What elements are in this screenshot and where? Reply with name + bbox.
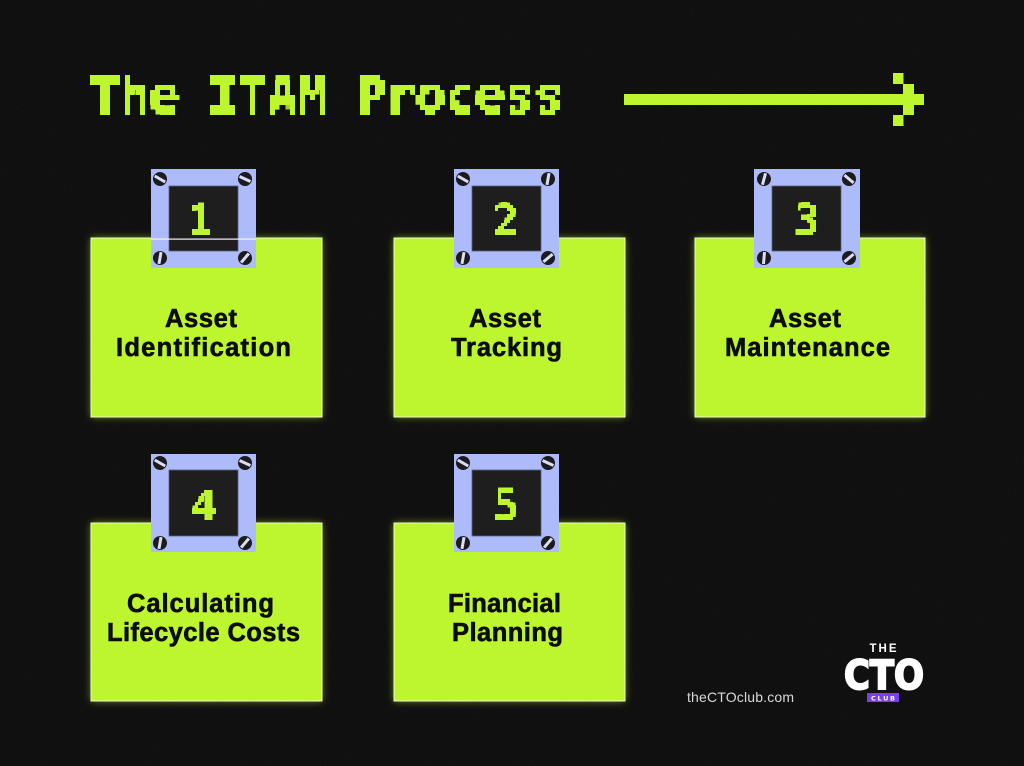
- card 1: Asset Identification: Identification: [116, 334, 291, 362]
- badge 5: 5: [493, 481, 519, 531]
- card 5: Financial Planning: Planning: [452, 619, 563, 647]
- card 1: Asset Identification: Asset: [165, 305, 238, 333]
- badge 2: 2: [493, 196, 519, 246]
- title: The ITAM Process: [90, 67, 564, 125]
- logo: THE: [870, 643, 897, 655]
- card 3: Asset Maintenance: Asset: [769, 305, 842, 333]
- logo: CTO: [844, 653, 924, 699]
- badge 3: [754, 169, 860, 268]
- card 4: Calculating Lifecycle Costs: Lifecycle Costs: [107, 619, 300, 647]
- card 5: Financial Planning: [394, 523, 625, 701]
- card 3: Asset Maintenance: [695, 238, 925, 417]
- badge 5: [453, 453, 559, 553]
- card 3: Asset Maintenance: Maintenance: [725, 334, 890, 362]
- card 2: Asset Tracking: Tracking: [451, 334, 562, 362]
- badge 3: 3: [794, 196, 820, 246]
- card 4: Calculating Lifecycle Costs: [91, 523, 322, 701]
- badge 2: [453, 169, 559, 268]
- card 5: Financial Planning: Financial: [448, 590, 561, 618]
- badge 1: [150, 169, 256, 268]
- card 2: Asset Tracking: Asset: [469, 305, 542, 333]
- badge 4: 4: [191, 481, 217, 531]
- website text: theCTOclub.com: [687, 689, 794, 705]
- card 2: Asset Tracking: [394, 238, 625, 417]
- badge 1: 1: [187, 196, 213, 246]
- logo: CLUB: [871, 694, 895, 702]
- badge 4: [150, 453, 256, 553]
- card 1: Asset Identification: [91, 238, 322, 417]
- card 4: Calculating Lifecycle Costs: Calculating: [127, 590, 274, 618]
- arrow: [624, 73, 924, 126]
